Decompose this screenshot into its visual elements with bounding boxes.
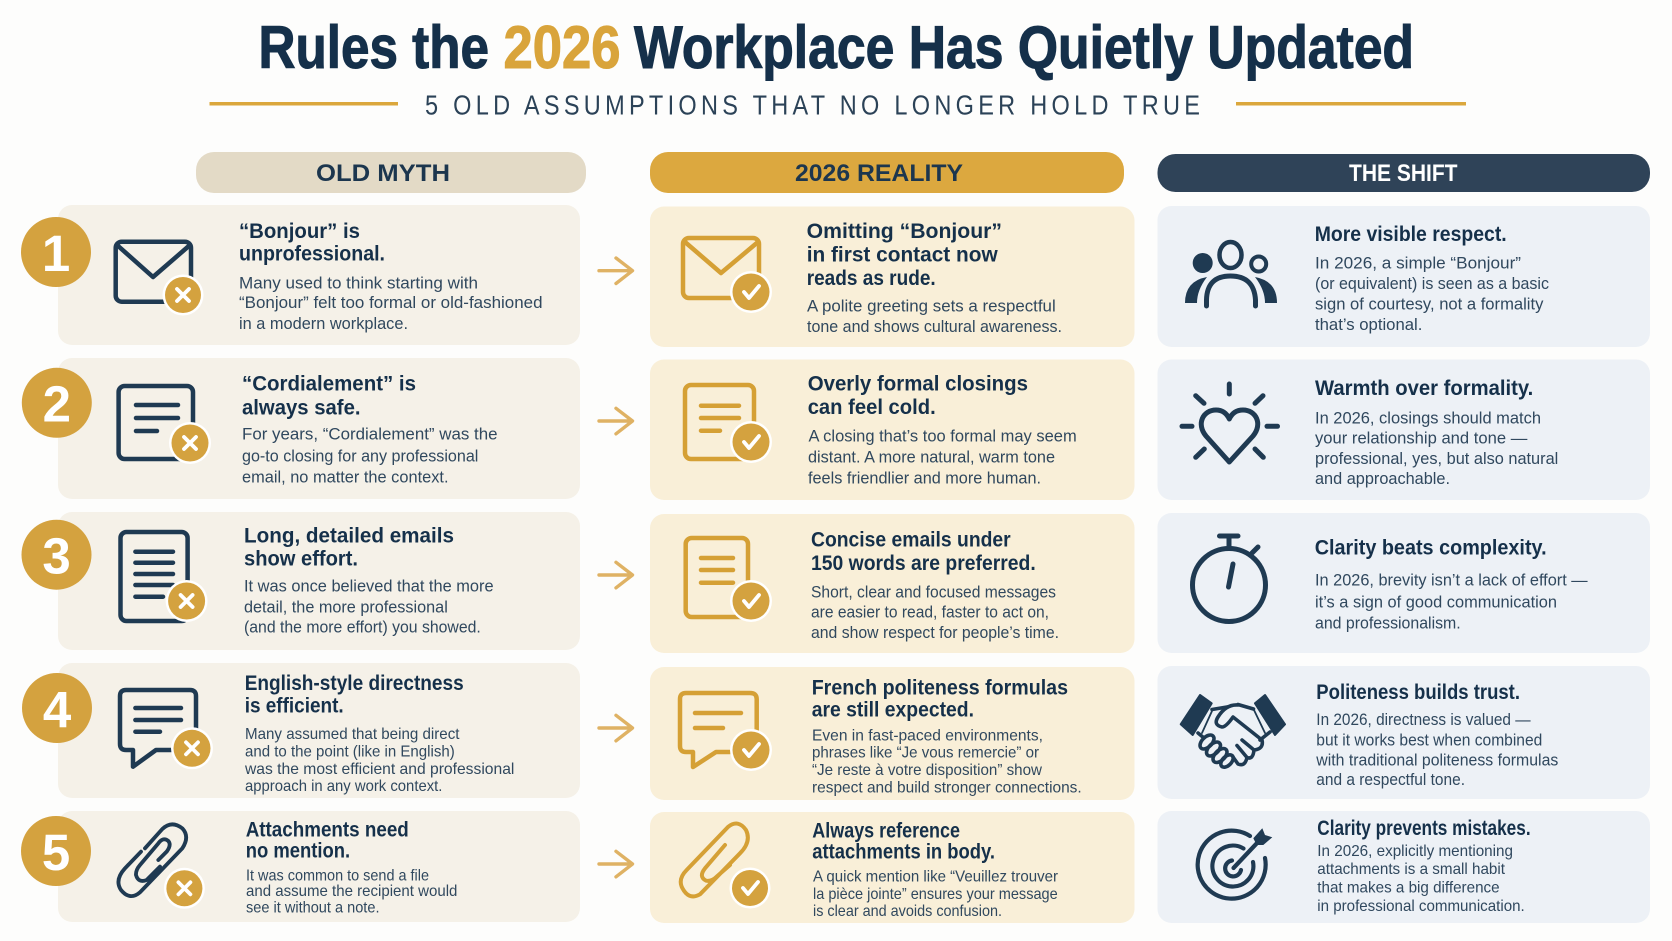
panel: reality 5: attachments in body. (812, 840, 995, 863)
icon: people (1185, 242, 1277, 306)
panel: myth 3 (22, 512, 580, 650)
panel: shift 2: your relationship and tone — (1315, 428, 1527, 447)
panel: shift 3: and professionalism. (1315, 613, 1461, 632)
panel: shift 2: professional, yes, but also natural (1315, 449, 1558, 468)
panel: shift 1: In 2026, a simple “Bonjour” (1315, 253, 1521, 272)
panel: reality 4: “Je reste à votre disposition” show (812, 762, 1042, 779)
panel: myth 5: no mention. (246, 839, 350, 862)
panel: myth 3: (and the more effort) you showed. (244, 618, 481, 637)
panel: shift 5: that makes a big difference (1317, 879, 1500, 896)
panel: myth 3: Long, detailed emails (244, 524, 454, 547)
icon: document with check (685, 385, 772, 463)
panel: myth 4: and to the point (like in English) (245, 744, 455, 761)
panel: myth 2: For years, “Cordialement” was the (242, 424, 498, 443)
panel: myth 1 (21, 205, 580, 345)
panel: reality 1: in first contact now (807, 244, 998, 267)
arrow 3 (599, 562, 632, 588)
panel: reality 2: Overly formal closings (808, 373, 1028, 396)
panel: myth 3: show effort. (244, 548, 358, 571)
panel: reality 5 (650, 812, 1134, 923)
column header: the shift (1158, 154, 1650, 192)
panel: myth 4: Many assumed that being direct (245, 726, 460, 743)
panel: reality 4: respect and build stronger connections. (812, 780, 1082, 797)
panel: myth 2: “Cordialement” is (242, 373, 416, 396)
column header: 2026 reality: 2026 REALITY (795, 160, 963, 187)
arrow 1 (599, 258, 632, 284)
panel: reality 2: distant. A more natural, warm tone (808, 447, 1055, 466)
number badge 4 (22, 673, 92, 743)
panel: shift 4: and a respectful tone. (1316, 770, 1465, 789)
row 3 (22, 512, 1650, 653)
panel: shift 1: that’s optional. (1315, 315, 1422, 334)
icon: document with cross (119, 386, 211, 464)
panel: shift 3: In 2026, brevity isn’t a lack of effort — (1315, 571, 1588, 590)
panel: myth 1: “Bonjour” is (239, 220, 360, 243)
icon: stopwatch (1192, 536, 1266, 622)
panel: shift 1: More visible respect. (1315, 223, 1507, 246)
panel: myth 1: Many used to think starting with (239, 274, 478, 293)
row 4 (22, 663, 1650, 800)
panel: shift 2: In 2026, closings should match (1315, 408, 1541, 427)
panel: reality 2 (650, 360, 1134, 500)
panel: shift 5: attachments is a small habit (1317, 861, 1506, 878)
panel: shift 1: (or equivalent) is seen as a basic (1315, 274, 1549, 293)
panel: shift 5: In 2026, explicitly mentioning (1317, 843, 1513, 860)
panel: myth 5 (21, 811, 580, 922)
panel: shift 1 (1158, 206, 1650, 347)
panel: shift 4: Politeness builds trust. (1316, 681, 1520, 704)
panel: myth 5: It was common to send a file (246, 868, 429, 885)
column header: old myth: OLD MYTH (316, 160, 450, 187)
panel: reality 3: are easier to read, faster to act on, (811, 603, 1049, 622)
panel: reality 5: la pièce jointe” ensures your message (813, 886, 1058, 903)
icon: paperclip with check (681, 824, 770, 908)
icon: speech bubble with cross (120, 690, 213, 769)
panel: myth 5: Attachments need (246, 819, 409, 842)
subtitle: 5 OLD ASSUMPTIONS THAT NO LONGER HOLD TRUE (425, 91, 1200, 121)
panel: reality 3: and show respect for people’s time. (811, 623, 1059, 642)
icon: target with arrow (1198, 828, 1272, 899)
icon: envelope with check (683, 238, 772, 313)
column header: the shift: THE SHIFT (1349, 160, 1458, 187)
panel: reality 2: A closing that’s too formal may seem (808, 427, 1077, 446)
panel: reality 1 (650, 206, 1134, 347)
panel: myth 1: “Bonjour” felt too formal or old-fashioned (239, 293, 542, 312)
row 5 (21, 811, 1650, 923)
panel: myth 2: always safe. (242, 396, 360, 419)
arrow 4 (599, 715, 632, 741)
panel: shift 5 (1158, 811, 1650, 923)
panel: reality 1: A polite greeting sets a respectful (807, 297, 1056, 316)
arrow 2 (599, 408, 632, 434)
panel: shift 4: but it works best when combined (1316, 731, 1542, 750)
panel: shift 2: and approachable. (1315, 469, 1450, 488)
title (258, 14, 1414, 81)
number badge 1: 1 (42, 225, 70, 282)
number badge 4: 4 (43, 681, 72, 738)
panel: reality 3: Concise emails under (811, 529, 1011, 552)
panel: myth 4 (22, 663, 580, 798)
panel: myth 3: It was once believed that the more (244, 577, 494, 596)
number badge 5 (21, 816, 91, 886)
panel: shift 3 (1158, 513, 1650, 653)
panel: shift 1: sign of courtesy, not a formality (1315, 295, 1544, 314)
panel: shift 4 (1158, 666, 1650, 799)
panel: shift 4: In 2026, directness is valued — (1316, 710, 1531, 729)
icon: handshake (1181, 695, 1285, 769)
number badge 2: 2 (43, 376, 71, 433)
panel: reality 4 (650, 667, 1134, 800)
column header: 2026 reality (650, 152, 1124, 193)
panel: myth 2 (22, 358, 580, 499)
title: Workplace Has Quietly Updated (634, 14, 1414, 81)
panel: myth 4: English-style directness (245, 672, 464, 695)
panel: reality 4: are still expected. (812, 699, 974, 722)
panel: reality 1: tone and shows cultural awareness. (807, 317, 1062, 336)
icon: heart with rays (1182, 384, 1278, 462)
panel: reality 4: French politeness formulas (812, 676, 1068, 699)
panel: myth 4: approach in any work context. (245, 778, 442, 795)
arrow 5 (599, 851, 632, 877)
panel: shift 5: in professional communication. (1317, 898, 1525, 915)
icon: long document with cross (120, 532, 208, 622)
panel: reality 3: Short, clear and focused messages (811, 582, 1056, 601)
panel: myth 2: email, no matter the context. (242, 467, 448, 486)
panel: reality 5: is clear and avoids confusion. (813, 903, 1002, 920)
panel: shift 5: Clarity prevents mistakes. (1317, 817, 1531, 840)
row 2 (22, 358, 1650, 500)
panel: myth 1: unprofessional. (239, 243, 385, 266)
panel: myth 2: go-to closing for any professional (242, 447, 478, 466)
number badge 2 (22, 368, 92, 438)
panel: shift 3: Clarity beats complexity. (1315, 536, 1547, 559)
icon: paperclip with cross (118, 824, 205, 909)
number badge 3: 3 (42, 528, 71, 584)
panel: shift 4: with traditional politeness formulas (1315, 751, 1558, 770)
icon: short document with check (686, 538, 772, 622)
number badge 1 (21, 217, 91, 287)
subtitle (210, 91, 1466, 121)
panel: reality 4: phrases like “Je vous remercie” or (812, 745, 1040, 762)
icon: envelope with cross (116, 242, 204, 316)
column header: old myth (196, 152, 586, 193)
panel: shift 3: it’s a sign of good communication (1315, 592, 1557, 611)
panel: myth 5: and assume the recipient would (246, 883, 457, 900)
panel: reality 5: A quick mention like “Veuillez trouver (813, 869, 1059, 886)
panel: reality 3: 150 words are preferred. (811, 552, 1036, 575)
title: Rules the (258, 14, 489, 81)
panel: myth 5: see it without a note. (246, 900, 380, 917)
panel: reality 2: feels friendlier and more human. (808, 468, 1041, 487)
panel: shift 2 (1158, 360, 1650, 500)
panel: myth 3: detail, the more professional (244, 597, 448, 616)
panel: reality 5: Always reference (812, 820, 960, 843)
title: 2026 (504, 14, 620, 81)
panel: myth 4: is efficient. (245, 694, 344, 717)
panel: myth 1: in a modern workplace. (239, 314, 408, 333)
icon: speech bubble with check (680, 693, 772, 771)
panel: shift 2: Warmth over formality. (1315, 377, 1533, 400)
panel: reality 3 (650, 514, 1134, 653)
panel: reality 4: Even in fast-paced environments, (812, 728, 1043, 745)
panel: reality 1: reads as rude. (807, 267, 936, 290)
panel: reality 2: can feel cold. (808, 396, 936, 419)
panel: myth 4: was the most efficient and professional (244, 761, 514, 778)
number badge 3 (22, 520, 92, 590)
row 1 (21, 205, 1650, 347)
panel: reality 1: Omitting “Bonjour” (807, 220, 1002, 243)
number badge 5: 5 (42, 824, 70, 881)
